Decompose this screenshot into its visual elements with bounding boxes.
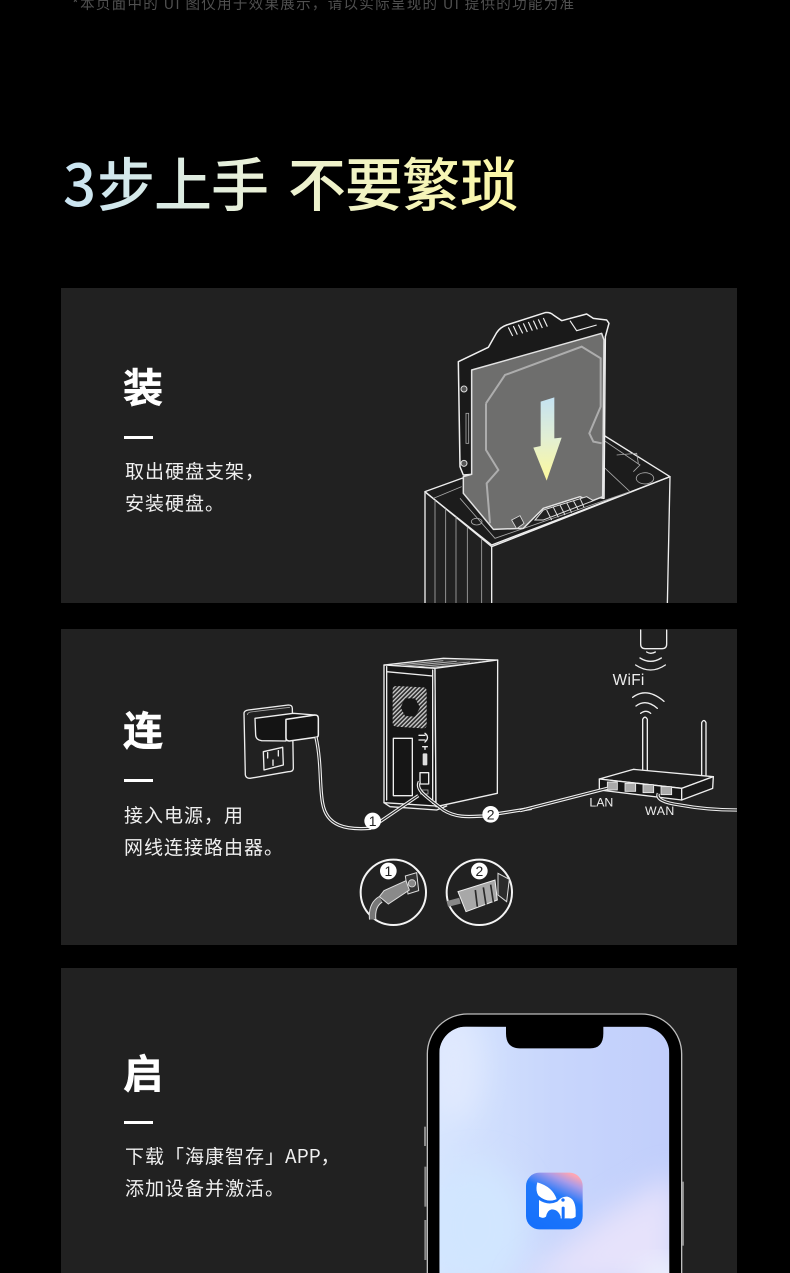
badge 1: 1 <box>369 813 377 829</box>
text: connect instructions <box>124 801 284 860</box>
dash: launch <box>124 1121 153 1124</box>
wan cable <box>658 793 737 810</box>
badge 1 <box>364 813 381 829</box>
enclosure <box>425 435 670 605</box>
panel: step 1 install <box>61 288 737 605</box>
phone side buttons <box>424 1127 684 1260</box>
illustration: phone <box>423 1010 697 1273</box>
badge 2: 2 <box>487 806 495 822</box>
elephant logo <box>536 1182 576 1219</box>
badge 2 <box>482 806 499 823</box>
text: launch instructions <box>125 1142 341 1201</box>
text: connect instructions: 网线连接路由器。 <box>124 833 284 860</box>
tower device <box>384 658 498 810</box>
arrow: down <box>533 397 562 481</box>
router <box>599 717 713 800</box>
phone bottom <box>641 630 667 649</box>
detail circle 1: 1 <box>384 863 392 879</box>
illustration: wiring diagram left <box>244 658 532 925</box>
text: launch instructions: 下载「海康智存」APP， <box>125 1142 341 1169</box>
heading: install: 装 <box>123 356 163 414</box>
title: 3步上手 不要繁琐 <box>63 139 518 223</box>
wifi label: WiFi <box>613 672 644 689</box>
panel: step 2 connect <box>61 629 737 945</box>
text: install instructions <box>125 457 265 516</box>
dash: install <box>124 436 153 439</box>
wan label: WAN <box>645 804 674 818</box>
hard drive caddy <box>458 313 609 498</box>
text: launch instructions: 添加设备并激活。 <box>125 1174 285 1201</box>
heading: connect: 连 <box>123 699 163 757</box>
text: install instructions: 安装硬盘。 <box>125 489 225 516</box>
fan grille <box>393 686 427 728</box>
cable 2 <box>418 782 532 817</box>
panel: step 3 launch <box>61 968 737 1273</box>
detail circle 2: 2 <box>475 863 483 879</box>
hard drive body <box>463 333 604 529</box>
lan label: LAN <box>589 796 613 810</box>
dash: connect <box>124 779 153 782</box>
caddy grip ribs <box>508 318 597 336</box>
app icon <box>526 1173 583 1229</box>
wifi waves upper <box>636 652 665 670</box>
text: install instructions: 取出硬盘支架， <box>125 457 265 484</box>
phone screen <box>439 1026 670 1273</box>
wall socket <box>244 705 293 778</box>
illustration: drive going into enclosure <box>425 313 670 605</box>
lan cable <box>520 788 607 811</box>
heading: launch: 启 <box>123 1042 163 1100</box>
text: connect instructions: 接入电源，用 <box>124 801 244 828</box>
drive connector ribs <box>535 497 593 520</box>
power adapter <box>255 713 318 741</box>
rear panel slot <box>393 738 412 796</box>
caddy screws <box>461 386 469 466</box>
drive inner plate outline <box>486 347 602 523</box>
rear ports <box>419 733 429 794</box>
detail circle 2 <box>447 860 512 925</box>
cable 1 <box>316 737 418 829</box>
detail circle 1 <box>361 860 426 925</box>
wifi waves lower <box>633 693 664 713</box>
phone body <box>427 1014 682 1273</box>
drive latch <box>512 516 524 529</box>
illustration: wifi and router right <box>520 630 737 818</box>
